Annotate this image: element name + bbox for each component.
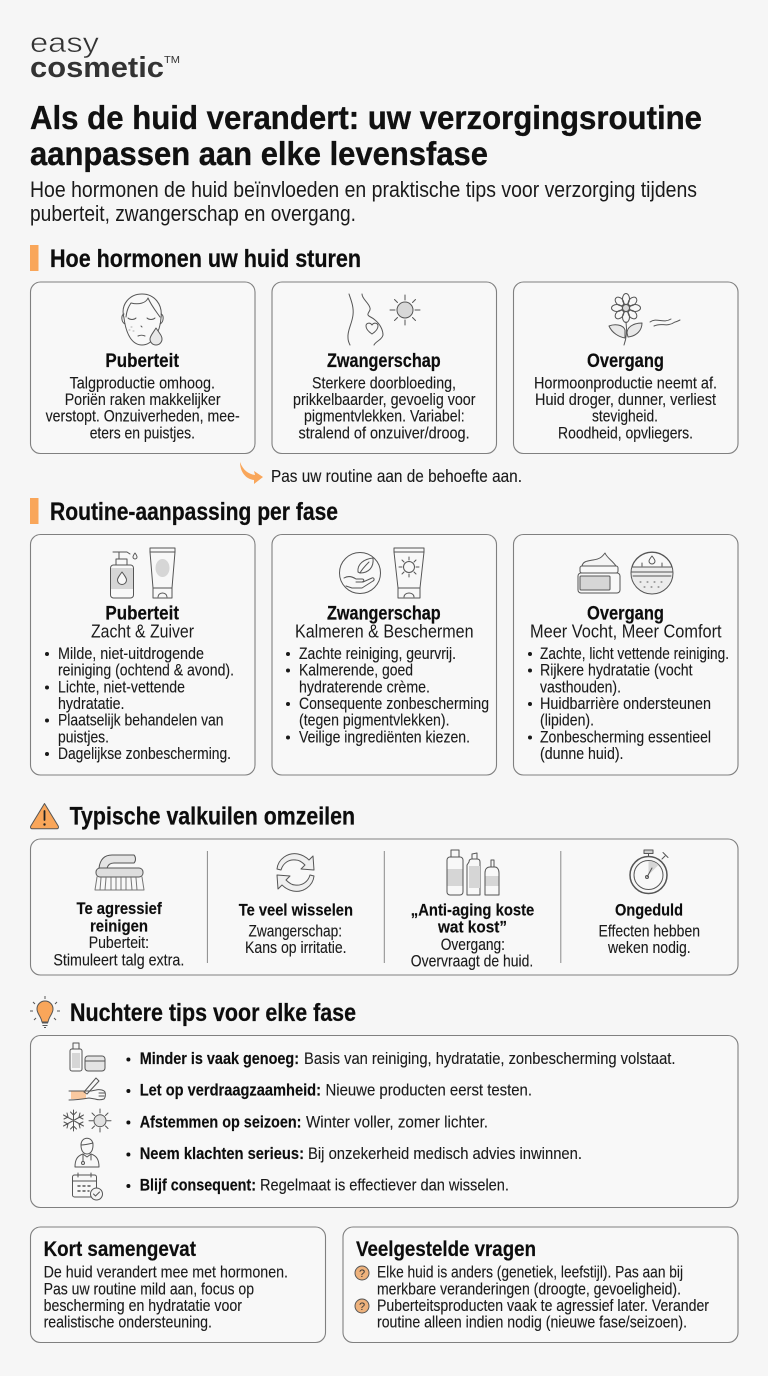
description: Roodheid, opvliegers. — [558, 424, 693, 442]
description — [46, 374, 240, 442]
icon: doctor — [75, 1138, 99, 1167]
description: Poriën raken makkelijker — [65, 391, 221, 409]
icon: calendar check — [72, 1173, 102, 1200]
logo: cosmetic — [30, 52, 164, 84]
subheading: Zacht & Zuiver — [91, 620, 194, 642]
subtitle: Hoe hormonen de huid beïnvloeden en praktische tips voor verzorging tijdens — [30, 177, 697, 202]
icon: flower and wind — [609, 294, 680, 345]
faq answer 2: Puberteitsproducten vaak te agressief later. Verander — [377, 1297, 709, 1315]
bullet list: Zonbescherming essentieel — [540, 728, 711, 746]
pitfall: Ongeduld: Ongeduld — [615, 902, 683, 920]
bullet list: (lipiden). — [540, 712, 594, 730]
bullet list: Plaatselijk behandelen van — [58, 712, 224, 730]
heading: Zwangerschap — [327, 350, 441, 372]
tip 1: Basis van reiniging, hydratatie, zonbescherming volstaat. — [304, 1050, 676, 1068]
heading: Overgang — [587, 602, 664, 624]
tip 1 — [126, 1050, 675, 1068]
icon: cycle arrows — [277, 854, 314, 891]
description: Talgproductie omhoog. — [70, 374, 215, 392]
tip 5 — [126, 1177, 509, 1195]
bullet list: Milde, niet-uitdrogende — [58, 645, 204, 663]
bullet list: reiniging (ochtend & avond). — [58, 662, 234, 680]
panel: Puberteit hormones — [30, 282, 255, 454]
description: stralend of onzuiver/droog. — [298, 424, 470, 442]
icon: cream jar and skin barrier — [578, 552, 673, 594]
bullet list: Consequente zonbescherming — [299, 695, 489, 713]
question icon 1 — [355, 1266, 369, 1280]
description — [534, 374, 717, 442]
heading: Veelgestelde vragen — [356, 1237, 536, 1261]
logo: TM — [164, 55, 180, 66]
panel: Overgang hormones — [514, 282, 738, 454]
bullet list: puistjes. — [58, 728, 109, 746]
tip 2: Let op verdraagzaamheid: — [140, 1082, 321, 1100]
logo — [30, 27, 180, 84]
pitfall: Anti-aging: „Anti-aging koste — [411, 902, 534, 920]
panel: Zwangerschap routine — [272, 534, 496, 775]
heading: Overgang — [587, 350, 664, 372]
icon: face with drop — [122, 294, 163, 345]
description: eters en puistjes. — [90, 424, 195, 442]
panel: Zwangerschap hormones — [272, 282, 496, 454]
tip 2: Nieuwe producten eerst testen. — [326, 1082, 532, 1100]
pitfall: Anti-aging — [411, 850, 534, 971]
icon: pregnant silhouette and sun — [348, 294, 420, 345]
bullet list: (tegen pigmentvlekken). — [299, 712, 450, 730]
question icon 1: ? — [359, 1268, 365, 1280]
icon: bottle and jar — [70, 1043, 105, 1071]
heading: Zwangerschap — [327, 602, 441, 624]
bullet list: Zachte, licht vettende reiniging. — [540, 645, 729, 663]
summary text: realistische ondersteuning. — [44, 1314, 212, 1332]
heading: Hoe hormonen uw huid sturen: Hoe hormonen uw huid sturen — [50, 245, 361, 273]
question icon 2 — [355, 1299, 369, 1313]
tip 1: Minder is vaak genoeg: — [140, 1050, 299, 1068]
panel: Puberteit routine — [30, 534, 255, 775]
icon: leaf on hand and sunscreen tube — [340, 548, 424, 598]
description: verstopt. Onzuiverheden, mee- — [46, 408, 240, 426]
description: Huid droger, dunner, verliest — [535, 391, 716, 409]
panel: Kort samengevat — [30, 1227, 326, 1342]
bullet list: hydraterende crème. — [299, 678, 430, 696]
subtitle — [30, 177, 697, 226]
tip 5: Blijf consequent: — [140, 1177, 256, 1195]
subheading: Meer Vocht, Meer Comfort — [530, 620, 722, 642]
pitfall: Te agressief reinigen: Puberteit: — [89, 934, 149, 952]
heading: Routine-aanpassing per fase: Routine-aanpassing per fase — [50, 498, 338, 526]
pitfall: Te veel wisselen: Te veel wisselen — [239, 902, 353, 920]
faq answer 1 — [377, 1264, 683, 1298]
panel: Overgang routine — [514, 534, 738, 775]
pitfall: Ongeduld: Effecten hebben — [598, 923, 700, 941]
bullet list: Dagelijkse zonbescherming. — [58, 745, 231, 763]
pitfall: Te veel wisselen: Kans op irritatie. — [245, 939, 347, 957]
heading: Puberteit — [105, 602, 179, 624]
icon: light bulb — [30, 996, 60, 1028]
arrow — [240, 462, 263, 484]
pitfall: Te agressief reinigen: Te agressief — [76, 900, 162, 918]
description — [293, 374, 476, 442]
description: prikkelbaarder, gevoelig voor — [293, 391, 476, 409]
title: aanpassen aan elke levensfase — [30, 135, 488, 172]
heading: Puberteit — [105, 350, 179, 372]
panel: tips — [30, 1036, 738, 1208]
pitfall: Anti-aging: Overgang: — [441, 936, 505, 954]
bullet list: Huidbarrière ondersteunen — [540, 695, 711, 713]
bullet list: hydratatie. — [58, 695, 124, 713]
title — [30, 99, 702, 172]
icon: brush — [95, 855, 144, 890]
icon: snowflake and sun — [64, 1109, 111, 1132]
pitfall: Te agressief reinigen — [53, 855, 184, 970]
icon: patch test on arm — [69, 1078, 105, 1100]
tip 2 — [126, 1082, 532, 1100]
tip 4: Neem klachten serieus: — [140, 1145, 304, 1163]
panel: pitfalls — [30, 839, 738, 975]
pitfall: Te veel wisselen: Zwangerschap: — [248, 923, 342, 941]
pitfall: Te agressief reinigen: Stimuleert talg extra. — [53, 952, 184, 970]
question icon 2: ? — [359, 1301, 365, 1313]
title: Als de huid verandert: uw verzorgingsroutine — [30, 99, 702, 136]
bullet list: Veilige ingrediënten kiezen. — [299, 728, 470, 746]
subtitle: puberteit, zwangerschap en overgang. — [30, 201, 356, 226]
tip 3: Winter voller, zomer lichter. — [306, 1113, 488, 1131]
description: pigmentvlekken. Variabel: — [304, 408, 465, 426]
summary text — [44, 1264, 288, 1332]
bullet list: Lichte, niet-vettende — [58, 678, 185, 696]
logo: easy — [30, 27, 99, 58]
heading: Nuchtere tips voor elke fase — [30, 996, 356, 1028]
pitfall: Te veel wisselen — [239, 854, 353, 957]
tip 5: Regelmaat is effectiever dan wisselen. — [260, 1177, 509, 1195]
heading: Kort samengevat — [44, 1237, 196, 1261]
bullet list — [286, 645, 489, 746]
description: Sterkere doorbloeding, — [312, 374, 456, 392]
heading: Nuchtere tips voor elke fase: Nuchtere tips voor elke fase — [70, 999, 356, 1027]
faq answer 1: Elke huid is anders (genetiek, leefstijl). Pas aan bij — [377, 1264, 683, 1282]
callout: Pas uw routine aan de behoefte aan. — [271, 466, 522, 486]
bullet list: (dunne huid). — [540, 745, 624, 763]
summary text: bescherming en hydratatie voor — [44, 1297, 242, 1315]
pitfall: Te agressief reinigen: reinigen — [90, 918, 148, 936]
faq answer 2 — [377, 1297, 709, 1332]
pitfall: Anti-aging: wat kost” — [437, 919, 507, 937]
bullet list — [45, 645, 234, 763]
pitfall: Anti-aging: Overvraagt de huid. — [411, 953, 533, 971]
icon: three bottles — [447, 850, 499, 895]
panel: Veelgestelde vragen — [343, 1227, 738, 1342]
summary text: De huid verandert mee met hormonen. — [44, 1264, 288, 1282]
description: stevigheid. — [592, 408, 658, 426]
faq answer 2: routine alleen indien nodig (nieuwe fase/seizoen). — [377, 1314, 687, 1332]
icon: warning triangle — [30, 804, 59, 829]
summary text: Pas uw routine mild aan, focus op — [44, 1280, 254, 1298]
faq answer 1: merkbare veranderingen (droogte, gevoeligheid). — [377, 1280, 681, 1298]
tip 4: Bij onzekerheid medisch advies inwinnen. — [308, 1145, 582, 1163]
tip 4 — [126, 1145, 582, 1163]
tip 3 — [126, 1113, 488, 1131]
bullet list — [528, 645, 729, 763]
bullet list: Rijkere hydratatie (vocht — [540, 662, 693, 680]
description: Hormoonproductie neemt af. — [534, 374, 717, 392]
tip 3: Afstemmen op seizoen: — [140, 1113, 302, 1131]
pitfall: Ongeduld — [598, 850, 700, 957]
bullet list: Zachte reiniging, geurvrij. — [299, 645, 456, 663]
bullet list: vasthouden). — [540, 678, 621, 696]
icon: pump bottle and tube — [110, 548, 175, 598]
pitfall: Ongeduld: weken nodig. — [607, 939, 691, 957]
heading: Typische valkuilen omzeilen: Typische valkuilen omzeilen — [70, 802, 355, 830]
bullet list: Kalmerende, goed — [299, 662, 413, 680]
subheading: Kalmeren & Beschermen — [295, 620, 474, 642]
icon: stopwatch — [630, 850, 668, 894]
